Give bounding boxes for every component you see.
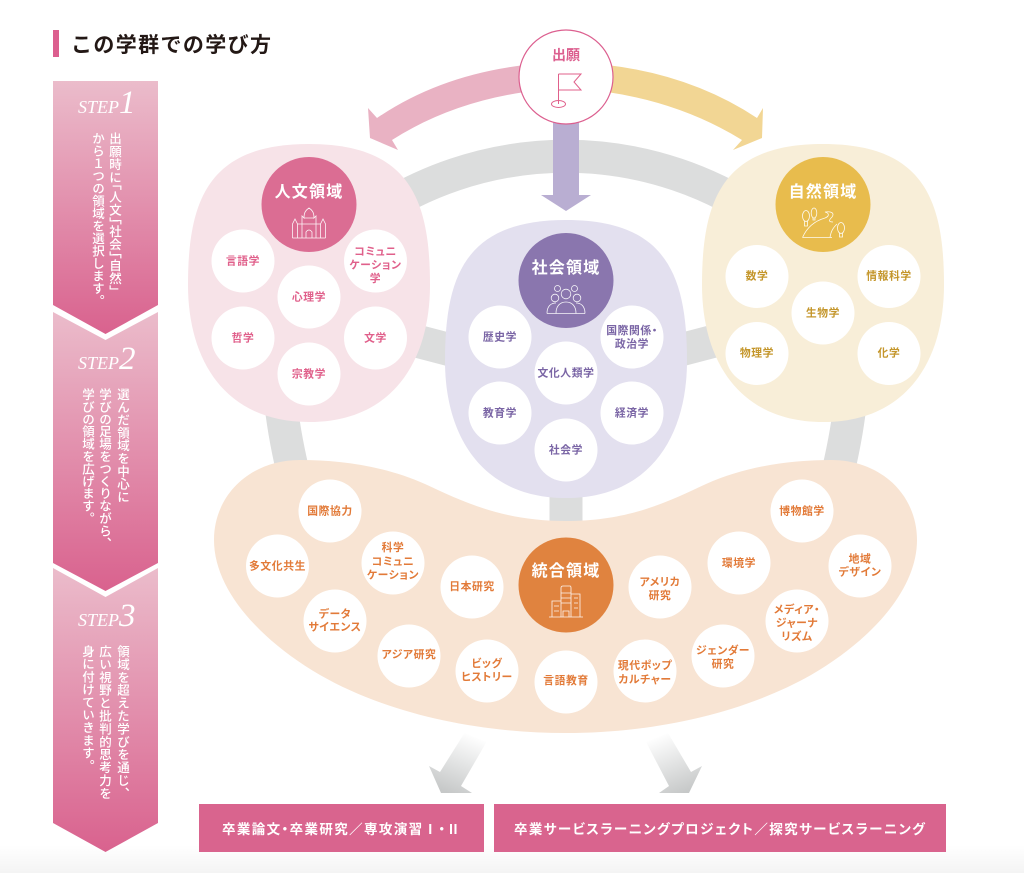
panel: social sciences: 社会学 xyxy=(549,442,583,456)
panel: social sciences: 歴史学 xyxy=(483,330,517,344)
panel: social sciences: 国際関係・ xyxy=(606,323,658,337)
heading: integrated xyxy=(518,538,614,632)
panel: social sciences: 経済学 xyxy=(615,406,649,420)
panel: integrated: 科学 xyxy=(382,540,404,554)
panel: integrated: カルチャー xyxy=(618,673,672,686)
panel: integrated: 多文化共生 xyxy=(249,558,306,572)
icon: domed building xyxy=(292,208,326,238)
heading: natural sciences: 自然領域 xyxy=(789,182,857,201)
icon: group of people xyxy=(547,286,585,314)
panel: integrated: ジャーナ xyxy=(776,616,818,630)
panel: humanities: 心理学 xyxy=(292,290,326,304)
title: この学群での学び方 xyxy=(71,34,271,57)
arrow: to humanities xyxy=(368,65,525,150)
step 2 panel xyxy=(53,312,158,591)
panel: integrated: リズム xyxy=(781,629,813,643)
panel: integrated: 博物館学 xyxy=(779,504,825,518)
step 2 panel: 選んだ領域を中心に xyxy=(115,388,129,503)
panel: integrated: 環境学 xyxy=(722,556,756,570)
panel: integrated: ビッグ xyxy=(472,656,503,670)
heading: humanities xyxy=(262,157,356,252)
step 1 panel: STEP1 xyxy=(78,85,136,121)
panel: integrated: ヒストリー xyxy=(461,670,513,684)
panel: natural sciences: 物理学 xyxy=(740,346,774,360)
panel: integrated: ケーション xyxy=(367,568,419,582)
panel: humanities: ケーション xyxy=(349,258,402,272)
application circle: 出願 xyxy=(552,47,580,63)
heading: natural sciences xyxy=(776,157,870,252)
panel: humanities: 言語学 xyxy=(226,254,260,268)
heading: integrated: 統合領域 xyxy=(532,562,600,580)
step 1 panel: 出願時 に 「人文 」 「社会 」 「自然」 xyxy=(107,132,121,298)
box: thesis xyxy=(199,804,484,852)
step 2 panel: STEP2 xyxy=(78,341,136,377)
gray connecting ring xyxy=(281,156,850,525)
panel: humanities: 宗教学 xyxy=(292,366,326,380)
box: thesis: 卒業論文・卒業研究／専攻演習Ⅰ・Ⅱ xyxy=(222,821,460,837)
panel: integrated: 地域 xyxy=(849,552,871,566)
step 3 panel: 領域を超えた学びを通じ、 xyxy=(115,644,129,800)
step 3 panel: 広い視野と批判的思考力を xyxy=(97,645,111,800)
panel: natural sciences: 情報科学 xyxy=(866,268,912,282)
panel: integrated: ジェンダー xyxy=(696,643,750,657)
heading: social sciences xyxy=(518,233,614,328)
arrow: to natural sciences xyxy=(607,65,763,150)
application circle xyxy=(519,30,613,124)
step 3 panel: STEP3 xyxy=(78,598,136,634)
panel: social sciences: 文化人類学 xyxy=(538,366,594,380)
heading: social sciences: 社会領域 xyxy=(532,259,600,277)
panel: integrated: 国際協力 xyxy=(307,504,353,518)
panel: humanities: 哲学 xyxy=(232,330,254,344)
icon: flag xyxy=(552,74,581,108)
panel: natural sciences: 化学 xyxy=(878,346,900,360)
step 1 panel: から１つの領域を選択します。 xyxy=(90,132,104,307)
panel: integrated: メディア・ xyxy=(774,602,820,616)
panel: integrated: 研究 xyxy=(649,588,671,602)
panel: social sciences xyxy=(445,220,687,498)
panel: integrated: コミュニ xyxy=(372,556,414,568)
panel: integrated: データ xyxy=(319,606,351,620)
panel: integrated: アジア研究 xyxy=(382,647,436,661)
panel: integrated: サイエンス xyxy=(308,620,362,634)
panel: humanities xyxy=(188,144,430,422)
panel: social sciences: 教育学 xyxy=(483,406,517,420)
panel: integrated: デザイン xyxy=(838,564,881,578)
arrow: to social sciences xyxy=(541,115,591,211)
step 1 panel xyxy=(53,81,158,334)
panel: integrated xyxy=(214,460,917,733)
step 3 panel xyxy=(53,568,158,852)
arrow: to service learning xyxy=(646,733,702,793)
step 2 panel: 学びの領域を広げます。 xyxy=(80,387,94,524)
panel: humanities: 学 xyxy=(370,271,381,285)
heading: humanities: 人文領域 xyxy=(275,183,343,201)
icon: trees and path xyxy=(802,208,844,238)
panel: social sciences: 政治学 xyxy=(615,336,649,350)
panel: natural sciences: 生物学 xyxy=(806,306,840,320)
panel: natural sciences xyxy=(702,144,944,422)
panel: integrated: 言語教育 xyxy=(543,673,589,687)
arrow: to thesis xyxy=(429,733,486,793)
box: service learning xyxy=(494,804,946,852)
panel: humanities: コミュニ xyxy=(354,246,397,258)
step 2 panel: 学びの足場をつくりながら、 xyxy=(97,387,111,549)
panel: integrated: 現代ポップ xyxy=(618,659,672,672)
panel: integrated: 研究 xyxy=(712,656,734,670)
panel: humanities: 文学 xyxy=(364,330,387,344)
box: service learning: 卒業サービスラーニングプロジェクト／探究サービスラーニング xyxy=(514,821,926,837)
panel: integrated: 日本研究 xyxy=(449,579,495,593)
panel: integrated: アメリカ xyxy=(640,576,680,588)
step 3 panel: 身に付けていきます。 xyxy=(80,644,94,772)
icon: buildings xyxy=(549,586,583,617)
panel: natural sciences: 数学 xyxy=(746,268,768,282)
